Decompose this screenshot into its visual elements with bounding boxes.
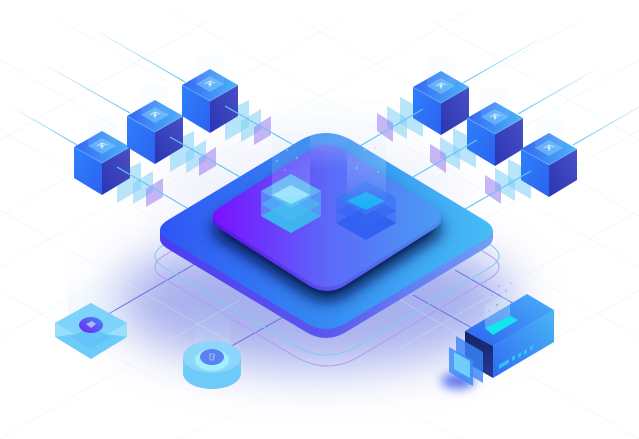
node: square token box — [55, 275, 127, 359]
coin icon — [79, 317, 103, 333]
panels: cube 5 — [430, 128, 476, 173]
sparkle particles — [276, 147, 379, 173]
inner line segments over panels — [117, 106, 531, 208]
platform top — [160, 133, 492, 329]
panels: cube 4 — [377, 97, 423, 142]
cube 5 — [467, 88, 523, 166]
cube 4 — [413, 57, 469, 135]
panels: cube 2 — [170, 131, 216, 176]
node: round token disc — [183, 305, 241, 389]
background glow — [115, 145, 515, 368]
connector lines to bottom nodes — [91, 264, 530, 357]
panels: cube 6 — [485, 159, 531, 204]
front panels — [456, 336, 483, 383]
node: server box — [441, 282, 554, 389]
left layer stack (light) — [261, 174, 321, 233]
right layer stack (dark) — [336, 181, 396, 240]
light column — [485, 292, 510, 328]
connector lines to top cubes — [10, 27, 639, 239]
panels: cube 3 — [225, 100, 271, 145]
inner platform top — [213, 145, 441, 287]
light columns — [272, 100, 386, 206]
inner platform side — [213, 149, 441, 291]
platform side — [160, 142, 493, 338]
panels: cube 1 — [117, 162, 163, 207]
shadow under inner platform — [213, 158, 441, 300]
bitcoin icon — [200, 349, 224, 365]
cube 3 — [182, 55, 238, 133]
particles — [488, 282, 512, 312]
concentric base rings — [155, 147, 499, 366]
cube 6 — [521, 119, 577, 197]
central platform — [160, 133, 493, 338]
server body — [465, 331, 493, 378]
cube 1 — [74, 117, 130, 195]
cube 2 — [127, 86, 183, 164]
cyan slot — [485, 316, 518, 335]
server shadow — [441, 373, 475, 389]
front indicators — [499, 345, 533, 369]
